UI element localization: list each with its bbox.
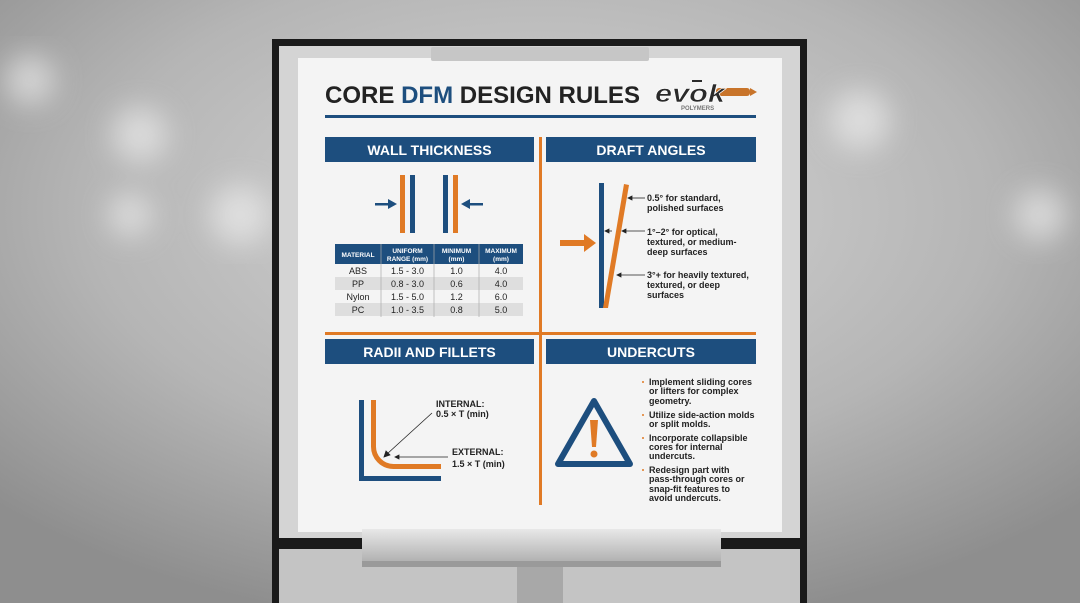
text: draft callouts: textured, or medium- (647, 237, 737, 247)
table: materials: Nylon (346, 292, 370, 302)
logo: evok polymers (655, 80, 757, 112)
divider horizontal orange (325, 332, 756, 335)
table: materials (335, 244, 523, 317)
table: materials: 5.0 (495, 305, 507, 315)
divider vertical orange (539, 137, 542, 505)
text: draft callouts: 0.5° for standard, (647, 193, 721, 203)
table: materials: 0.8 - 3.0 (391, 279, 424, 289)
text: undercut bullets: Redesign part with (649, 465, 730, 475)
table: materials: 1.5 - 5.0 (391, 292, 424, 302)
table: materials: 6.0 (495, 292, 507, 302)
top clip (431, 47, 649, 61)
text: undercut bullets: Implement sliding cores (649, 377, 752, 387)
heading: undercuts (546, 339, 756, 364)
table: materials: 0.8 (450, 305, 463, 315)
table: materials: UNIFORM (392, 248, 423, 255)
table: materials: MATERIAL (341, 252, 375, 259)
board (298, 47, 782, 532)
arrows: draft callouts (605, 196, 645, 277)
table: materials: 1.2 (450, 292, 463, 302)
text: undercut bullets: avoid undercuts. (649, 493, 721, 503)
text: draft callouts: deep surfaces (647, 247, 708, 257)
text: undercut bullets: undercuts. (649, 451, 695, 461)
table: materials: 4.0 (495, 266, 507, 276)
diagram: fillet (362, 400, 441, 478)
arrows: fillet callouts (384, 413, 448, 459)
panel: radii and fillets (325, 339, 534, 478)
logo: evok polymers: POLYMERS (681, 106, 714, 112)
text: fillet callouts: 0.5 × T (min) (436, 409, 489, 419)
table: materials: MINIMUM (442, 248, 471, 255)
tray (362, 529, 721, 567)
table: materials: 0.6 (450, 279, 463, 289)
logo: evok polymers: evok (655, 80, 726, 108)
panel: draft angles (546, 137, 756, 308)
text: undercut bullets: or split molds. (649, 419, 711, 429)
text: fillet callouts: 1.5 × T (min) (452, 459, 505, 469)
heading: draft angles (546, 137, 756, 162)
text: fillet callouts: INTERNAL: (436, 399, 484, 409)
table: materials: 1.0 - 3.5 (391, 305, 424, 315)
heading: wall thickness (325, 137, 534, 162)
text: undercut bullets: Utilize side-action molds (649, 410, 755, 420)
text: draft callouts: textured, or deep (647, 280, 721, 290)
heading: draft angles: DRAFT ANGLES (596, 142, 706, 158)
table: materials: (mm) (493, 256, 509, 263)
table: materials: 1.5 - 3.0 (391, 266, 424, 276)
text: draft callouts (647, 193, 749, 300)
heading: radii and fillets (325, 339, 534, 364)
text: undercut bullets: Incorporate collapsible (649, 433, 748, 443)
heading: wall thickness: WALL THICKNESS (367, 142, 492, 158)
table: materials: RANGE (mm) (387, 256, 428, 263)
text: undercut bullets (642, 377, 755, 503)
table: materials: PP (352, 279, 364, 289)
text: draft callouts: surfaces (647, 290, 684, 300)
text: undercut bullets: snap-fit features to (649, 484, 731, 494)
diagram: draft wall (560, 183, 629, 308)
heading: radii and fillets: RADII AND FILLETS (363, 344, 496, 360)
icon: wall thickness bars (375, 175, 483, 233)
text: undercut bullets: pass-through cores or (649, 474, 745, 484)
text: fillet callouts: EXTERNAL: (452, 447, 504, 457)
text: fillet callouts (436, 399, 505, 469)
title: CORE DFM DESIGN RULES (325, 82, 640, 109)
panel: wall thickness (325, 137, 534, 317)
text: undercut bullets: geometry. (649, 396, 691, 406)
panel: undercuts (546, 339, 756, 503)
table: materials: (mm) (449, 256, 464, 263)
text: draft callouts: polished surfaces (647, 203, 724, 213)
text: undercut bullets: cores for internal (649, 442, 723, 452)
text: draft callouts: 3°+ for heavily textured, (647, 270, 749, 280)
text: draft callouts: 1°–2° for optical, (647, 227, 718, 237)
table: materials: ABS (349, 266, 367, 276)
text: undercut bullets: or lifters for complex (649, 386, 739, 396)
heading: undercuts: UNDERCUTS (607, 344, 695, 360)
icon: warning triangle (558, 401, 630, 464)
table: materials: 1.0 (450, 266, 463, 276)
table: materials: 4.0 (495, 279, 507, 289)
table: materials: MAXIMUM (485, 248, 517, 255)
sign stand frame (272, 39, 807, 603)
table: materials: PC (352, 305, 365, 315)
